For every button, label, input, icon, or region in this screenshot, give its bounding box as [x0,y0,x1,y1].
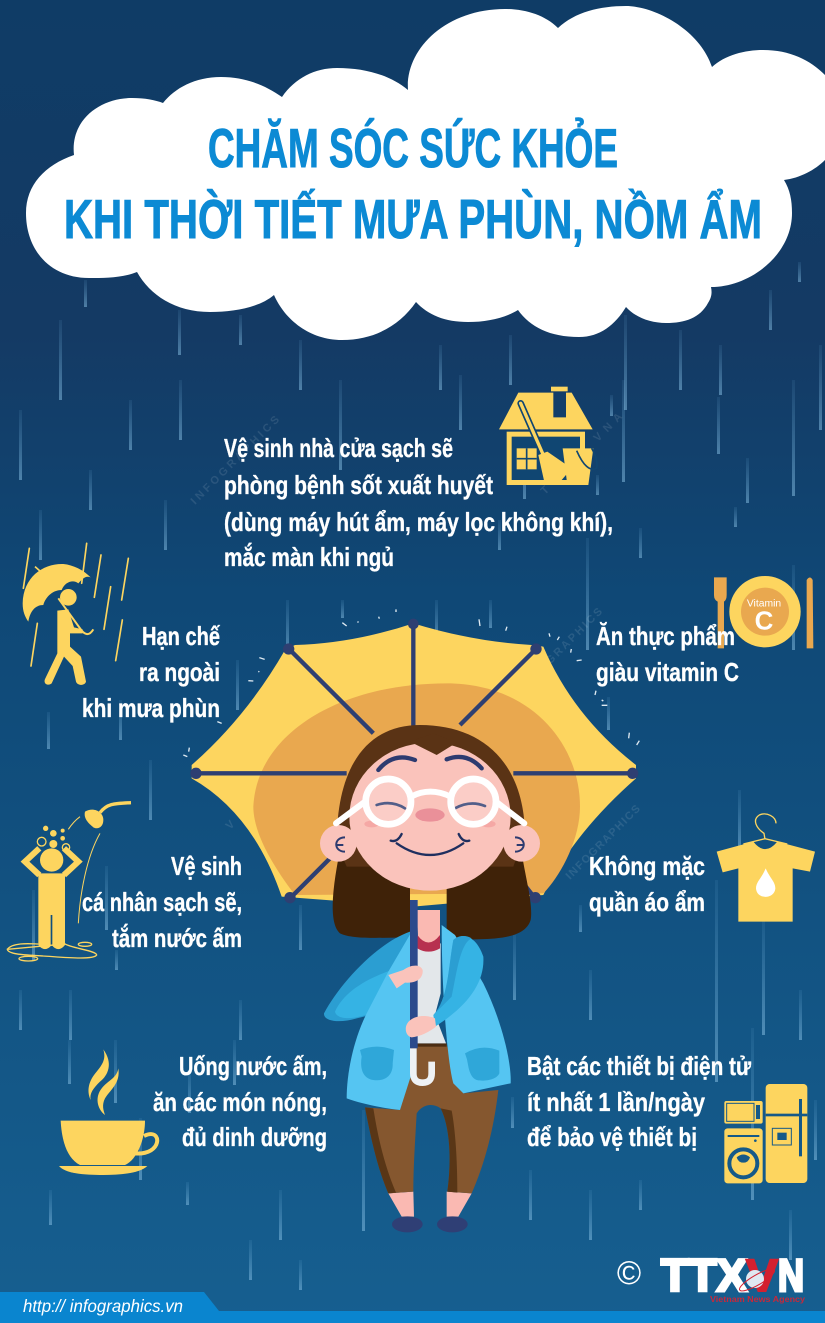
text: vitamin C food: Ăn thực phẩm [596,621,735,651]
ears [320,825,540,862]
watermarks: VNA [224,788,268,832]
watermarks: INFOGRAPHICS [564,803,643,882]
logo: TTXVN: N [778,1250,804,1301]
logo: TTXVN: V [746,1250,778,1301]
logo: TTXVN: Vietnam News Agency [710,1295,806,1304]
text: clean the house: mắc màn khi ngủ [224,542,394,572]
text: personal hygiene: Vệ sinh [171,851,242,881]
watermarks: INFOGRAPHICS [519,606,605,692]
text: clean the house: Vệ sinh nhà cửa sạch sẽ [224,433,453,463]
icon: plate with vitamin C: C [755,605,774,635]
text: turn on electronics: Bật các thiết bị điện tử [527,1051,751,1081]
character: head [320,725,540,891]
face [349,733,511,891]
text: warm drinks and food: ăn các món nóng, [153,1087,327,1117]
text: clean the house [224,433,613,572]
logo: TTXVN: TTX [661,1250,747,1301]
text: vitamin C food [596,621,739,687]
text: warm drinks and food [153,1051,327,1152]
text: no damp clothes: Không mặc [589,851,705,881]
icon: plate with vitamin C: Vitamin [747,599,781,610]
hands [388,966,436,1037]
text: personal hygiene [82,851,242,953]
text: clean the house: (dùng máy hút ẩm, máy lọc không khí), [224,507,613,537]
text: no damp clothes [589,851,705,917]
cloud [26,6,825,340]
copyright symbol: © [617,1254,641,1291]
text: no damp clothes: quần áo ẩm [589,887,705,917]
text: limit going out [82,621,220,723]
text: clean the house: phòng bệnh sốt xuất huyết [224,470,493,500]
glasses [336,779,524,824]
text: warm drinks and food: đủ dinh dưỡng [182,1122,327,1152]
icon: hot cup [59,1049,157,1175]
character: hair back [333,833,531,940]
raindrop ticks around umbrella [183,609,639,757]
umbrella pole and handle [410,900,432,1083]
icon: plate with vitamin C [714,576,813,648]
watermarks [189,411,643,882]
jacket [324,925,511,1110]
icon: person walking with umbrella [23,543,128,685]
text: personal hygiene: cá nhân sạch sẽ, [82,887,242,917]
icon: person showering [7,803,131,961]
footer url: http:// infographics.vn [23,1296,183,1316]
watermarks: INFOGRAPHICS [189,414,282,507]
text: limit going out: ra ngoài [139,657,220,687]
text: turn on electronics: ít nhất 1 lần/ngày [527,1087,705,1117]
icon: home appliances [724,1084,807,1183]
text: turn on electronics: để bảo vệ thiết bị [527,1122,697,1152]
text: limit going out: Hạn chế [142,621,220,651]
logo: TTXVN [661,1250,806,1304]
hair top [337,725,525,867]
text: vitamin C food: giàu vitamin C [596,657,739,687]
text: turn on electronics [527,1051,751,1152]
title [64,117,762,250]
umbrella canopy [190,619,638,907]
character: body [324,900,511,1232]
watermarks: TTXVN VNA [539,411,625,497]
legs and trousers [365,1043,498,1232]
text: personal hygiene: tắm nước ấm [112,923,242,953]
watermarks: INFOGRAPHICS [244,659,337,752]
neck and shirt [415,910,446,1043]
text: limit going out: khi mưa phùn [82,693,220,723]
footer bar [0,1292,825,1323]
icon: house and broom [499,387,597,485]
title: CHĂM SÓC SỨC KHỎE [208,117,618,179]
text: warm drinks and food: Uống nước ấm, [179,1051,327,1081]
icon: wet t-shirt on hanger [717,814,815,922]
